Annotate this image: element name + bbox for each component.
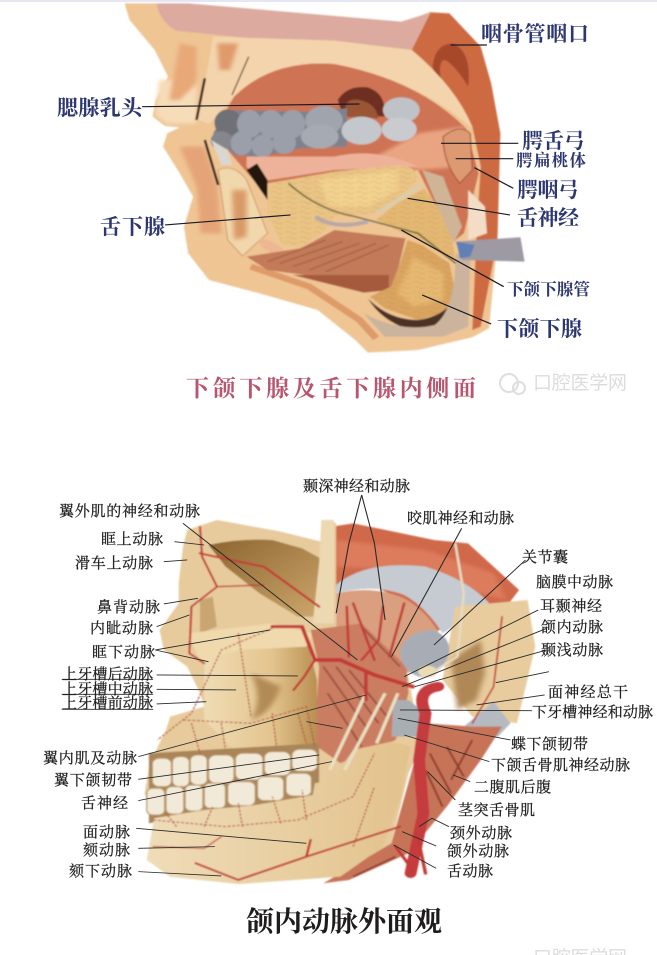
labels: mouth cross-section: 舌下腺 [100, 215, 165, 239]
chin inner band [251, 267, 376, 338]
skull [145, 520, 421, 884]
mandible body [147, 742, 411, 884]
pharynx wall [412, 13, 500, 330]
teeth [211, 97, 420, 157]
dental gap shadow [149, 743, 319, 823]
labels: mouth cross-section: 腭咽弓 [517, 178, 579, 202]
labels: skull figure: 眶下动脉 [92, 644, 155, 661]
labels: skull figure: 鼻背动脉 [97, 598, 160, 616]
sphenoid strip [313, 520, 334, 623]
palate band [199, 37, 472, 128]
labels: skull figure: 上牙槽后动脉 [62, 666, 153, 683]
oral cavity [213, 63, 479, 242]
mylohyoid muscle [247, 230, 405, 293]
labels: skull figure: 滑车上动脉 [75, 555, 153, 572]
head silhouette [125, 3, 500, 353]
soft palate highlight [376, 127, 464, 170]
leader lines: mouth figure [142, 45, 518, 324]
labels: skull figure: 翼下颌韧带 [54, 772, 132, 789]
labels: skull figure: 下牙槽神经和动脉 [532, 704, 653, 721]
nose and lip flesh texture [169, 43, 196, 100]
pterygoid muscle [311, 623, 408, 763]
nerve and duct [288, 183, 456, 263]
labels: skull figure: 颏下动脉 [69, 863, 132, 880]
gland: sublingual [268, 165, 417, 248]
labels: skull figure: 面动脉 [83, 824, 130, 841]
labels: skull figure: 颞浅动脉 [541, 642, 603, 659]
eustachian tube opening [433, 43, 469, 87]
maxilla [204, 637, 317, 753]
labels: mouth cross-section: 下颌下腺 [497, 317, 582, 341]
icon: watermark logo [500, 374, 525, 394]
title: top figure: 下颌下腺及舌下腺内侧面 [186, 376, 476, 401]
zygomatic highlight [187, 623, 313, 660]
labels: skull figure: 眶上动脉 [101, 531, 163, 548]
labels: mouth cross-section: 腮腺乳头 [57, 96, 144, 120]
labels: skull figure: 脑膜中动脉 [536, 573, 613, 591]
arteries [153, 527, 502, 880]
frenulum stump [259, 238, 284, 255]
parotid papilla [338, 87, 385, 117]
labels: skull figure [43, 478, 653, 880]
nose highlight [155, 80, 196, 124]
labels: mouth cross-section [57, 22, 590, 341]
mastoid shadow [451, 640, 485, 710]
neck muscles [323, 723, 502, 883]
labels: skull figure: 上牙槽前动脉 [62, 695, 153, 712]
auriculotemporal nerve [426, 543, 464, 677]
deep temporal region [336, 590, 438, 673]
lower gum strip [247, 153, 418, 182]
labels: mouth cross-section: 下颌下腺管 [507, 279, 590, 299]
muscle and ramus right [422, 170, 462, 243]
tongue nerve band [330, 693, 398, 770]
labels: skull figure: 颈外动脉 [450, 825, 512, 842]
temporalis muscle fan [332, 523, 519, 633]
fan highlight [336, 540, 506, 600]
floor of mouth [364, 253, 470, 337]
capsule [400, 630, 449, 677]
canine fossa [251, 673, 281, 720]
illustration: skull with maxillary artery [145, 520, 535, 884]
stylomandibular grey [464, 702, 511, 737]
labels: skull figure: 咬肌神经和动脉 [407, 510, 514, 527]
dental branches [153, 628, 374, 847]
temporal bone right [443, 600, 535, 723]
labels: skull figure: 下颌舌骨肌神经动脉 [491, 757, 630, 774]
labels: skull figure: 二腹肌后腹 [474, 779, 551, 796]
labels: mouth cross-section: 咽骨管咽口 [481, 22, 589, 46]
nasal floor band [157, 3, 431, 50]
labels: skull figure: 颌内动脉 [541, 619, 603, 636]
teeth [147, 749, 317, 815]
labels: skull figure: 耳颞神经 [540, 598, 602, 615]
labels: mouth cross-section: 腭扁桃体 [516, 150, 586, 170]
incisor [211, 140, 232, 165]
mandible section [218, 168, 268, 256]
title: bottom figure: 颌内动脉外面观 [246, 906, 442, 938]
labels: skull figure: 翼外肌的神经和动脉 [59, 503, 200, 520]
labels: skull figure: 茎突舌骨肌 [458, 801, 535, 819]
labels: skull figure: 关节囊 [522, 548, 568, 566]
condyle [418, 666, 437, 678]
labels: skull figure: 颏动脉 [83, 842, 130, 859]
illustration: mouth cross-section, medial view [125, 3, 525, 353]
gland: submandibular upper lobe [376, 188, 456, 263]
labels: skull figure: 舌动脉 [447, 863, 493, 880]
sphenomandibular ligament [391, 700, 426, 737]
labels: skull figure: 蝶下颌韧带 [511, 736, 588, 753]
leader lines: skull figure [62, 495, 549, 876]
lip slit [196, 78, 218, 185]
labels: skull figure: 面神经总干 [548, 684, 628, 701]
labels: skull figure: 颞深神经和动脉 [303, 478, 410, 495]
labels: skull figure: 内眦动脉 [90, 620, 153, 637]
orbit [208, 540, 323, 617]
watermark text: 口腔医学网 [533, 372, 627, 394]
gland: submandibular [370, 240, 456, 320]
muscle texture [323, 627, 400, 747]
labels: skull figure: 舌神经 [81, 795, 128, 812]
labels: skull figure: 颌外动脉 [447, 843, 509, 860]
labels: mouth cross-section: 腭舌弓 [522, 129, 585, 153]
labels: skull figure: 上牙槽中动脉 [62, 681, 153, 698]
labels: skull figure: 翼内肌及动脉 [43, 750, 137, 767]
nasal cavity [200, 597, 217, 633]
tonsil [443, 129, 472, 183]
labels: mouth cross-section: 舌神经 [517, 206, 580, 230]
cut stump grey [456, 237, 525, 262]
temporal tendon [336, 565, 489, 633]
